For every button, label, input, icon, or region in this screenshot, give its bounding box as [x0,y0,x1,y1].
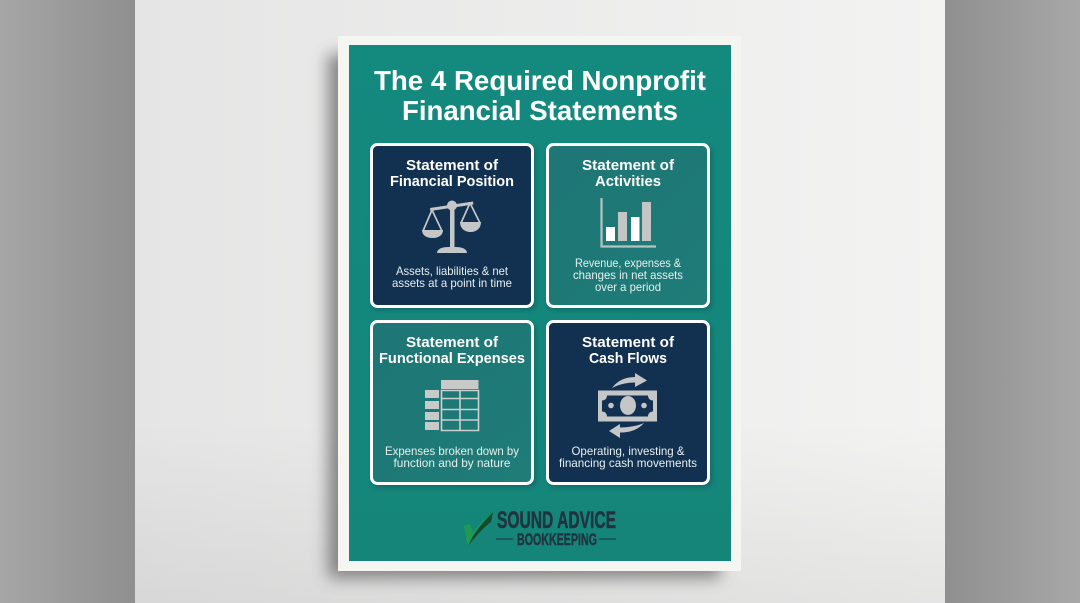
icon: balance scale [422,200,481,253]
heading [390,157,514,190]
title [374,65,706,126]
description: assets at a point in time [392,276,512,290]
logo: sound advice bookkeeping: SOUND ADVICE [497,507,616,534]
description: Operating, investing & [572,444,684,458]
panel: statement of cash flows [548,322,712,487]
heading: Financial Position [390,173,514,190]
poster frame [338,36,741,571]
description: Assets, liabilities & net [396,264,509,278]
description: over a period [595,280,661,294]
description: Revenue, expenses & [575,256,681,270]
icon: table [425,380,479,431]
logo: sound advice bookkeeping: BOOKKEEPING [517,531,597,549]
icon: check mark [464,512,493,546]
panel: statement of financial position [372,144,536,310]
heading: Functional Expenses [379,350,525,367]
panel: statement of activities [548,144,712,310]
description: financing cash movements [559,456,697,470]
heading: Statement of [406,334,499,351]
heading: Statement of [406,157,499,174]
description: changes in net assets [573,268,683,282]
heading: Activities [595,173,661,190]
heading: Statement of [582,334,675,351]
title: The 4 Required Nonprofit [374,65,706,96]
description [392,264,512,290]
heading: Statement of [582,157,675,174]
poster shadow [328,54,720,578]
description [559,444,697,470]
description: function and by nature [394,456,511,470]
heading: Cash Flows [589,350,667,367]
description [573,256,683,294]
icon: bar chart [602,198,656,246]
icon: cash with circular arrows [598,373,657,438]
description: Expenses broken down by [385,444,519,458]
heading [582,157,675,190]
poster panel [349,45,731,561]
description [385,444,519,470]
title: Financial Statements [402,95,678,126]
logo: sound advice bookkeeping [464,507,616,549]
heading [379,334,525,367]
heading [582,334,675,367]
panel: statement of functional expenses [372,322,536,487]
